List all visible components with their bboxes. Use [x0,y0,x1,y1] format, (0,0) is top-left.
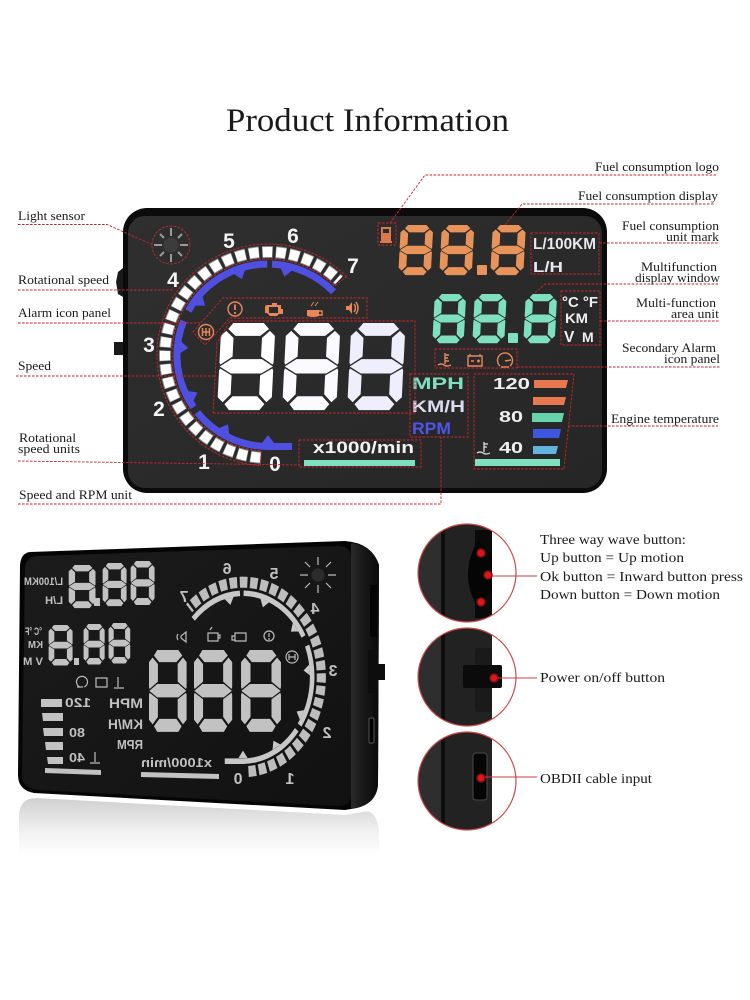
engine temperature scale: 120 [493,376,530,393]
multifunction digits [432,294,557,343]
button description text [540,533,743,603]
device body [18,541,379,810]
multifunction unit text [562,295,598,346]
icon: gauge [498,353,512,367]
multifunction unit text: KM [565,311,588,326]
left labels: Speed and RPM unit [19,488,133,502]
right labels: area unit [671,307,720,321]
mirrored text: KM/H [108,716,143,732]
right labels [578,160,721,426]
red dashed callout outlines [152,223,600,469]
mirrored text: MPH [109,695,143,711]
mirrored ring numbers: 7 [179,589,188,606]
mirrored ring numbers: 6 [222,561,231,578]
mirrored text: 80 [69,725,85,740]
mirrored text: V M [23,656,43,668]
rotational speed numbers: 0 [269,453,281,476]
fuel unit text: L/H [533,259,563,276]
button description text: Three way wave button: [540,533,686,548]
icon: warning [228,302,242,316]
left labels: speed units [18,442,80,456]
mirrored tick ring [189,582,321,771]
mirrored text: 120 [65,695,91,710]
side buttons [114,268,123,355]
mirrored text: 40 [69,750,85,765]
x1000/min unit [304,438,415,466]
speed units: MPH [412,374,464,393]
rotational speed numbers: 5 [223,230,235,253]
rotational speed numbers: 3 [143,334,155,357]
mirrored ring numbers [179,561,337,788]
right labels: unit mark [666,230,720,244]
left labels: Light sensor [18,209,86,223]
engine temperature scale: 40 [499,440,523,457]
mirrored text: L/H [45,595,63,607]
side power button [368,650,385,693]
speed units: RPM [412,419,451,438]
icon: speaker [346,302,358,314]
detail circle: OBDII port [418,732,537,830]
fuel consumption digits [398,225,526,275]
engine temperature scale [475,376,568,466]
x1000/min unit: x1000/min [313,438,414,457]
rotational speed ticks [165,252,339,458]
main device [114,208,607,493]
rotational speed blue arc [177,264,334,446]
red markers [477,549,492,606]
side wheel button [370,585,377,637]
right labels: Multi-function [636,296,717,310]
mirrored ring numbers: 0 [233,771,242,788]
left labels: Alarm icon panel [18,306,112,320]
speed digits [217,323,406,410]
left labels: Rotational speed [18,273,110,287]
mirrored text [23,576,212,770]
speed units [412,374,465,438]
speed units: KM/H [412,397,465,416]
side usb port [369,718,374,743]
left labels: Rotational [19,431,77,445]
leader lines [16,175,720,504]
multifunction unit text: V [564,329,575,346]
engine temperature scale: 80 [499,409,523,426]
power button label: Power on/off button [540,671,665,686]
icon: light sensor [154,228,188,262]
red marker [490,674,498,682]
right labels: Fuel consumption display [578,189,719,203]
screen [128,216,602,488]
mirrored text: L/100KM [24,576,63,588]
rotational speed numbers: 2 [153,398,165,421]
mirrored ring numbers: 4 [310,601,319,618]
device side [351,543,379,809]
left labels: Speed [18,359,52,373]
title: Product Information [226,103,509,139]
mirrored ring numbers: 3 [328,663,337,680]
alarm icons [198,302,358,340]
icon: battery [468,354,482,366]
button description text: Ok button = Inward button press [540,570,743,585]
detail circle: three way wave button [418,524,537,622]
lower device photo [18,541,385,810]
rotational speed numbers: 7 [347,255,359,278]
rotational speed numbers [143,225,359,476]
rotational speed numbers: 1 [198,451,210,474]
fuel unit text [533,236,596,276]
rotational speed numbers: 4 [167,269,179,292]
mirrored ring numbers: 2 [322,725,331,742]
secondary alarm icons [438,353,512,367]
button description text: Up button = Up motion [540,551,684,566]
device body [123,208,607,493]
icon: gear shift [198,324,214,340]
button description text: Down button = Down motion [540,588,720,603]
icon: engine [265,303,283,316]
right labels: display window [635,271,720,285]
icon: coffee [307,302,322,317]
detail circle: power button [418,628,537,726]
mirrored temperature bars [41,699,219,779]
multifunction unit text: M [582,329,594,345]
left labels [18,209,133,502]
right labels: Fuel consumption [622,219,720,233]
mirrored digits [49,561,281,732]
right labels: Fuel consumption logo [595,160,719,174]
right labels: Multifunction [641,260,718,274]
right labels: Secondary Alarm [622,341,716,355]
screen [22,546,351,806]
mirrored text: x1000/min [141,755,212,770]
mirrored text: °C °F [25,626,42,638]
icon: coolant small [477,442,490,454]
mirrored text: RPM [117,737,143,752]
icon: fuel logo [380,227,392,243]
fuel unit text: L/100KM [533,236,596,253]
device reflection [19,798,379,855]
multifunction unit text: °C °F [562,295,598,311]
mirrored text: KM [28,640,43,651]
mirrored ring numbers: 5 [269,566,278,583]
infographic canvas [16,108,742,842]
icon: coolant [438,353,451,366]
mirrored icons [77,557,336,763]
rotational speed numbers: 6 [287,225,299,248]
OBDII label: OBDII cable input [540,772,652,787]
right labels: Engine temperature [611,412,719,426]
mirrored ring numbers: 1 [285,771,294,788]
right labels: icon panel [664,352,721,366]
red marker [477,774,485,782]
